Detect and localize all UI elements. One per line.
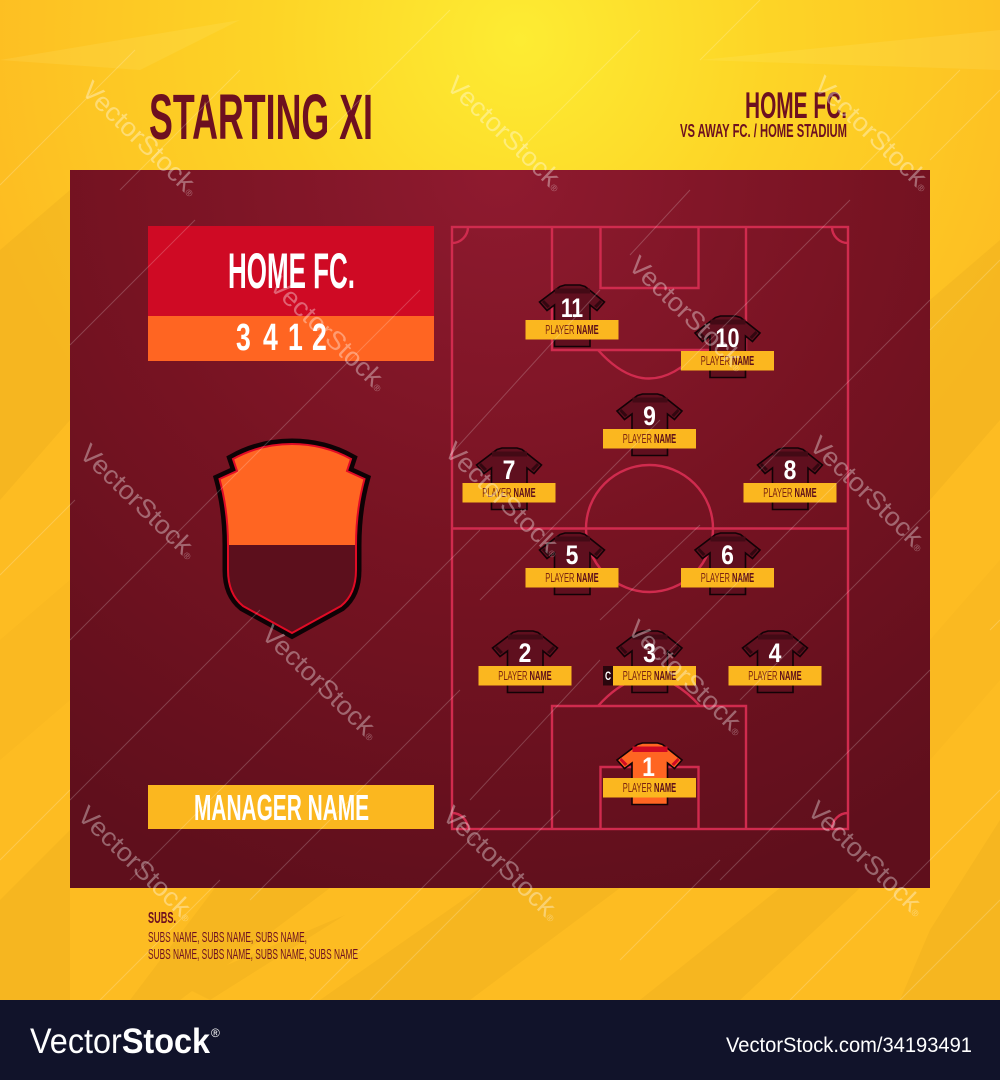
player 5: [526, 533, 618, 594]
player 3 captain: [603, 631, 696, 692]
title: starting XI: STARTING XI: [149, 81, 373, 153]
watermarks: VectorStock®: [802, 795, 932, 922]
watermarks: VectorStock®: [622, 614, 752, 741]
watermarks: VectorStock®: [256, 619, 386, 746]
player 1 goalkeeper: PLAYER NAME: [623, 781, 676, 796]
formation: 4: [263, 315, 278, 358]
substitutes list: SUBS NAME, SUBS NAME, SUBS NAME,: [148, 929, 307, 946]
footer logo: VectorStock: [30, 1022, 210, 1061]
player 6: PLAYER NAME: [701, 571, 754, 586]
player 11: PLAYER NAME: [545, 323, 599, 338]
player 4: 4: [769, 638, 781, 668]
watermarks: VectorStock®: [76, 75, 206, 202]
player 9: 9: [643, 401, 656, 431]
watermarks: VectorStock®: [441, 70, 571, 197]
match heading: HOME FC.: [745, 85, 847, 126]
player 4: PLAYER NAME: [748, 669, 802, 684]
icon: club shield: [215, 444, 370, 640]
player 10: PLAYER NAME: [701, 354, 754, 369]
player 11: 11: [561, 294, 583, 324]
footer bar: [0, 1000, 1000, 1080]
panel: team sheet background: [70, 170, 930, 888]
player 3 captain: PLAYER NAME: [623, 669, 676, 684]
player 9: [603, 394, 696, 456]
captain badge: C: [605, 671, 611, 683]
watermarks: VectorStock®: [804, 430, 934, 557]
formation: 2: [312, 315, 327, 358]
substitutes list: SUBS.: [148, 910, 176, 927]
watermarks: VectorStock®: [74, 438, 204, 565]
player 8: [744, 448, 836, 510]
player 5: PLAYER NAME: [545, 571, 599, 586]
watermarks: VectorStock®: [437, 800, 567, 927]
player 5: 5: [566, 540, 578, 570]
player 1 goalkeeper: [603, 743, 696, 804]
team name: HOME FC.: [228, 243, 355, 299]
player 7: [462, 448, 556, 510]
watermarks: VectorStock®: [439, 436, 569, 563]
player 2: 2: [519, 638, 531, 668]
player 8: PLAYER NAME: [763, 486, 817, 501]
formation: 3: [236, 315, 251, 358]
player 1 goalkeeper: 1: [642, 752, 655, 782]
watermarks: VectorStock®: [264, 270, 394, 397]
player 3 captain: 3: [643, 638, 656, 668]
match heading: [680, 85, 847, 141]
player 6: [681, 533, 774, 594]
panel: team name and formation: [148, 226, 434, 361]
player 10: [681, 316, 774, 378]
player 9: PLAYER NAME: [623, 432, 676, 447]
substitutes list: [148, 910, 358, 963]
match heading: VS AWAY FC. / HOME STADIUM: [680, 121, 847, 141]
player 7: PLAYER NAME: [482, 486, 536, 501]
substitutes list: SUBS NAME, SUBS NAME, SUBS NAME, SUBS NAME: [148, 946, 358, 963]
player 8: 8: [784, 455, 796, 485]
player 4: [728, 631, 822, 692]
player 11: [526, 285, 618, 346]
manager name bar: [148, 785, 434, 829]
formation: 1: [288, 315, 303, 358]
footer logo: ®: [211, 1026, 220, 1040]
watermarks: VectorStock®: [72, 800, 202, 927]
formation: [236, 315, 327, 358]
player 6: 6: [721, 540, 734, 570]
manager name bar: MANAGER NAME: [194, 787, 369, 828]
watermarks: VectorStock®: [808, 70, 938, 197]
player 2: [478, 631, 572, 692]
pitch markings: [452, 227, 848, 829]
player 10: 10: [715, 324, 740, 354]
footer url: VectorStock.com/34193491: [726, 1034, 972, 1057]
watermarks: VectorStock®: [623, 250, 753, 377]
player 2: PLAYER NAME: [498, 669, 552, 684]
watermarks: [72, 70, 938, 927]
player 7: 7: [503, 455, 515, 485]
